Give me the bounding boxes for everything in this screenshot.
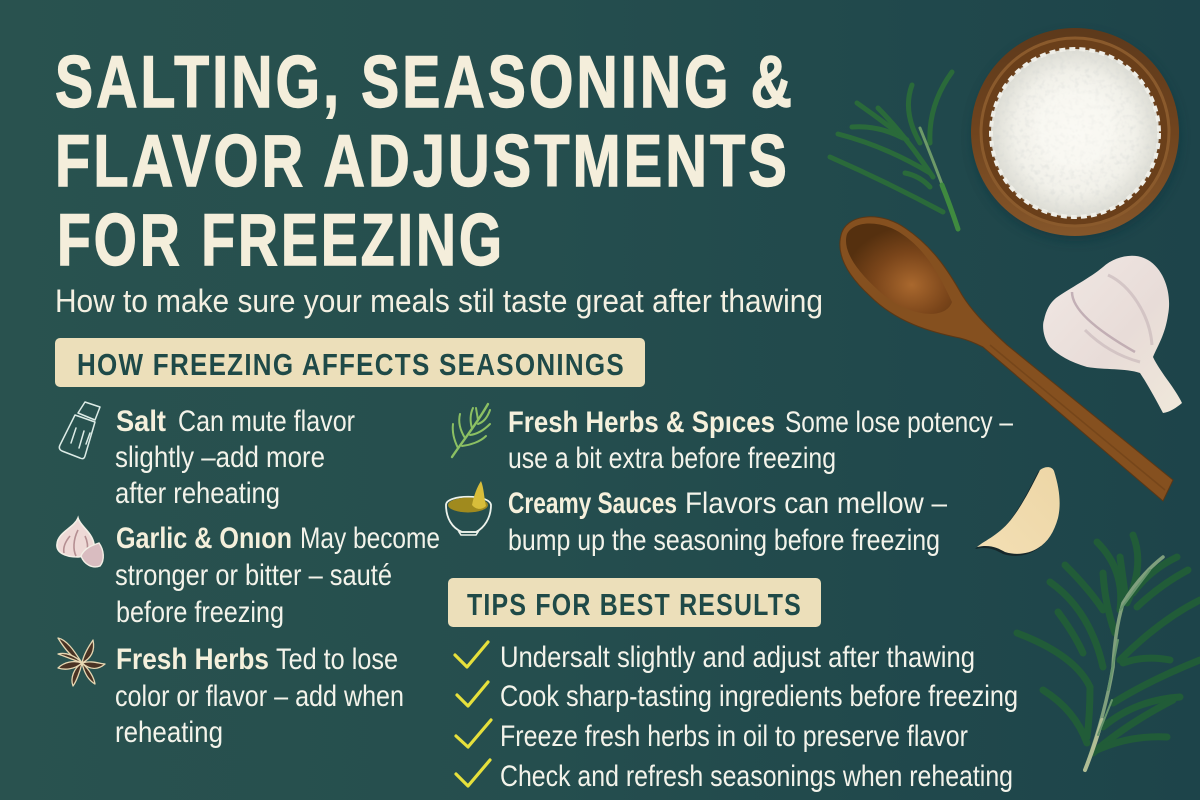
photo: rosemary sprig bottom: [1017, 535, 1200, 770]
item: salt: Can mute flavor: [178, 405, 355, 438]
subtitle: How to make sure your meals stil taste great after thawing: [55, 283, 823, 319]
panel: left seasoning list: [57, 402, 440, 749]
icon: sauce bowl: [446, 481, 491, 535]
tip 4: Check and refresh seasonings when reheating: [500, 760, 1013, 793]
photo: wooden spoon: [840, 217, 1173, 501]
item: fresh herbs: Ted to lose: [276, 643, 398, 676]
title: FOR FREEZING: [57, 200, 505, 281]
photo: garlic clove: [975, 467, 1060, 556]
heading: tips for best results: [448, 578, 821, 627]
panel: right seasoning list: [446, 404, 1013, 557]
item: fresh herbs: color or flavor – add when: [115, 680, 404, 713]
item: fresh herbs: reheating: [115, 716, 223, 749]
item: fresh herbs and spices: use a bit extra before freezing: [508, 442, 836, 475]
item: salt: after reheating: [115, 477, 280, 510]
photo: garlic bulb: [1043, 256, 1182, 413]
photo: rosemary sprig top: [830, 72, 958, 229]
icon: garlic: [57, 518, 103, 567]
item: creamy sauces: Flavors can mellow –: [685, 487, 947, 520]
item: fresh herbs and spices: Some lose potency –: [785, 406, 1013, 439]
item: salt: Salt: [116, 405, 166, 438]
item: creamy sauces: bump up the seasoning before freezing: [508, 524, 940, 557]
item: garlic and onion: May become: [300, 522, 440, 555]
item: fresh herbs: [58, 638, 404, 749]
title: FLAVOR ADJUSTMENTS: [55, 121, 790, 202]
panel: tips checklist: [455, 641, 1018, 793]
tip 1: Undersalt slightly and adjust after thawing: [500, 641, 975, 674]
item: garlic and onion: stronger or bitter – sauté: [115, 559, 392, 592]
item: garlic and onion: before freezing: [116, 596, 284, 629]
tip 3: Freeze fresh herbs in oil to preserve flavor: [500, 720, 968, 753]
heading: how freezing affects seasonings: HOW FREEZING AFFECTS SEASONINGS: [77, 347, 625, 382]
item: salt: [59, 402, 355, 510]
item: creamy sauces: Creamy Sauces: [508, 487, 677, 520]
icon: salt shaker: [59, 402, 100, 459]
item: fresh herbs and spices: [452, 404, 1013, 475]
icon: rosemary sprig: [452, 404, 490, 457]
item: salt: slightly –add more: [115, 441, 325, 474]
photo: wooden bowl of salt: [971, 28, 1180, 241]
item: garlic and onion: [57, 518, 440, 629]
item: garlic and onion: Garlic & Onıon: [116, 522, 292, 555]
heading: how freezing affects seasonings: [55, 338, 645, 387]
title: SALTING, SEASONING &: [55, 42, 795, 123]
title: [55, 42, 795, 281]
item: fresh herbs: Fresh Herbs: [116, 643, 269, 676]
item: creamy sauces: [446, 481, 947, 557]
icon: star anise: [58, 638, 105, 686]
heading: tips for best results: TIPS FOR BEST RESULTS: [467, 587, 802, 622]
item: fresh herbs and spices: Fresh Herbs & Spıces: [508, 406, 775, 439]
tip 2: Cook sharp-tasting ingredients before freezing: [500, 680, 1018, 713]
